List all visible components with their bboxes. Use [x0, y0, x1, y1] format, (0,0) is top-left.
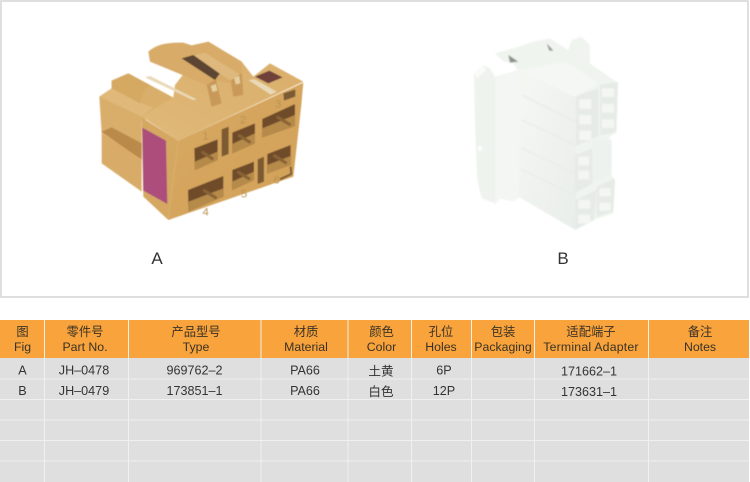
table column headers: Color	[367, 340, 396, 354]
label B: B	[557, 249, 569, 268]
table row B: JH–0479	[59, 384, 109, 398]
silhouette	[495, 37, 618, 230]
table row B: 173631–1	[561, 385, 617, 399]
mounting plate	[495, 70, 520, 205]
table row A: A	[18, 364, 27, 378]
cavity numbers: 4	[202, 206, 209, 218]
table row A: PA66	[290, 364, 320, 378]
table row B: B	[18, 384, 27, 398]
table column headers: Part No.	[62, 340, 108, 354]
upper rear rail	[99, 73, 175, 160]
cavity floors	[189, 115, 295, 212]
table column headers: Packaging	[474, 340, 532, 354]
table row B: 白色	[368, 384, 394, 399]
table row A: JH–0478	[59, 364, 109, 378]
table column headers: 备注	[688, 324, 712, 339]
left side wall	[142, 117, 178, 220]
connector B: white 12-hole housing	[474, 37, 618, 230]
table header background	[0, 320, 749, 358]
front face	[168, 83, 303, 220]
table column headers: 适配端子	[566, 325, 616, 339]
table: specifications	[0, 320, 749, 482]
label A: A	[151, 249, 163, 268]
table column headers: Terminal Adapter	[543, 340, 639, 354]
cavities	[578, 88, 614, 223]
panel: product photos	[1, 1, 748, 297]
table row A: 土黄	[368, 364, 394, 378]
cavity numbers	[202, 98, 281, 218]
table column headers: 产品型号	[171, 325, 221, 339]
table column headers: 图	[16, 325, 29, 339]
table column headers: Notes	[684, 340, 716, 354]
latch highlight strip	[145, 76, 197, 100]
cavity numbers: 2	[240, 114, 246, 126]
table column headers: 孔位	[429, 324, 453, 339]
cavity numbers: 6	[273, 174, 280, 186]
table column headers: Material	[284, 340, 328, 354]
table row A: 171662–1	[561, 364, 617, 378]
left rail	[474, 65, 495, 203]
table row B	[18, 384, 617, 399]
table column headers: 颜色	[369, 324, 394, 339]
latch	[148, 42, 243, 107]
side wall shading	[522, 95, 575, 195]
table column headers: Fig	[14, 340, 31, 354]
dividers	[222, 127, 264, 184]
six cavities	[188, 104, 295, 212]
body side	[518, 70, 576, 230]
table column headers: 包装	[491, 325, 515, 339]
table column headers: 零件号	[67, 325, 103, 339]
table row A: 969762–2	[166, 364, 223, 378]
connector A: tan 6-hole housing	[99, 42, 303, 220]
table column headers: 材质	[294, 325, 318, 339]
front faces	[575, 82, 618, 230]
cavity numbers: 3	[275, 98, 281, 110]
table column headers: Type	[183, 340, 209, 354]
table row B: 12P	[433, 384, 455, 398]
lower rear rail	[102, 133, 142, 192]
table column headers: Holes	[425, 340, 457, 354]
cavity terminals	[202, 117, 291, 198]
magenta label	[142, 128, 167, 204]
table column headers	[14, 324, 716, 354]
table row A	[18, 364, 617, 378]
table body background	[0, 358, 749, 482]
square top opening	[255, 71, 283, 83]
table row B: PA66	[290, 384, 320, 398]
cavity numbers: 5	[241, 188, 247, 200]
top face	[142, 42, 303, 141]
cavity numbers: 1	[202, 130, 209, 142]
tab slots	[508, 55, 518, 63]
table row B: 173851–1	[166, 384, 223, 398]
table row A: 6P	[436, 364, 452, 378]
